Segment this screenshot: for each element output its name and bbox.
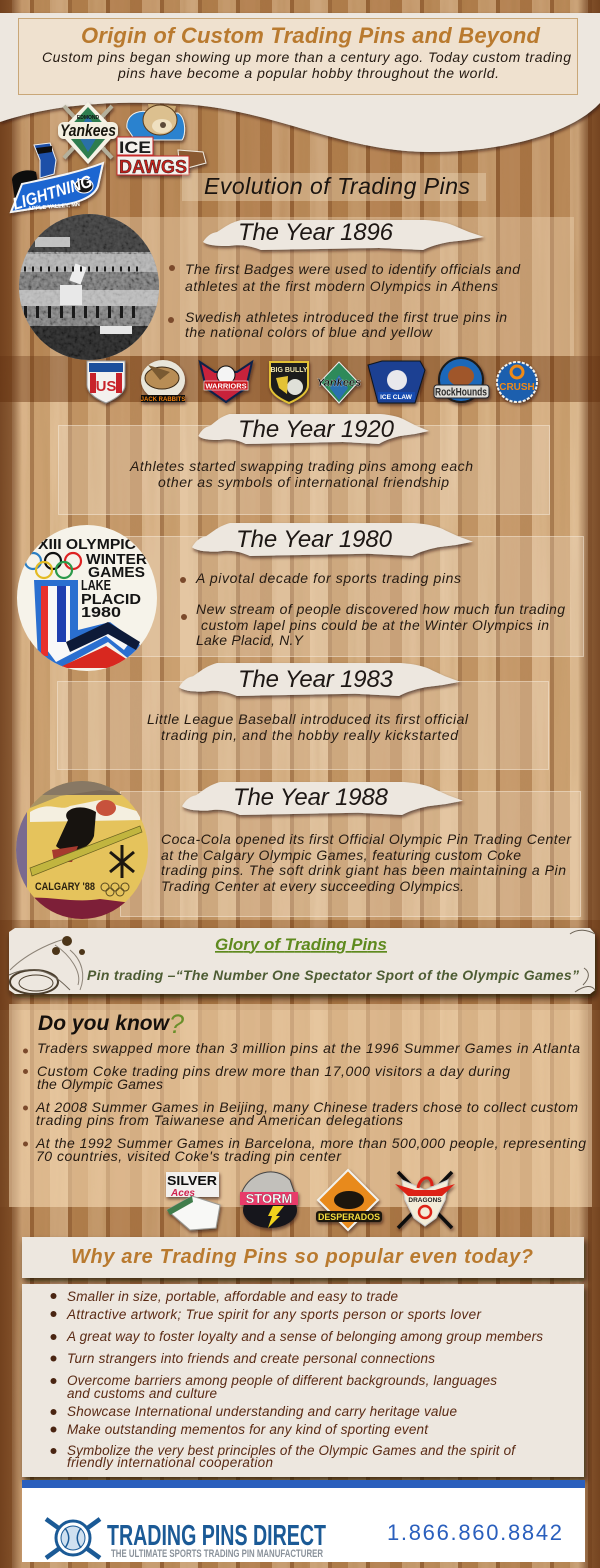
pin: Jack Rabbits: JACK RABBITS xyxy=(141,397,185,403)
pin: Warriors soccer: WARRIORS xyxy=(205,382,247,390)
title box xyxy=(18,18,578,94)
pin: Crush: CRUSH xyxy=(499,382,535,393)
panel: reasons list: Showcase International understanding and carry heritage value xyxy=(67,1404,457,1419)
pin: Big Bully soccer xyxy=(270,362,308,403)
pin: Ice Dawgs bulldog xyxy=(117,104,206,177)
bullet text: 1896: the national colors of blue and yellow xyxy=(185,324,433,340)
heading: Do you know: ? xyxy=(169,1009,184,1039)
bullet text: 1980: New stream of people discovered how much fun trading xyxy=(196,601,565,617)
banner: 1980 xyxy=(192,523,473,556)
panel: reasons list: friendly international cooperation xyxy=(67,1455,273,1470)
ornament: flowers and rings xyxy=(9,930,595,994)
title: Origin of Custom Trading Pins and Beyond xyxy=(81,23,541,48)
pin: RockHounds: RockHounds xyxy=(435,386,487,398)
banner: 1988: The Year 1988 xyxy=(233,784,389,811)
heading: Evolution of Trading Pins: Evolution of Trading Pins xyxy=(204,173,470,199)
header cream wave xyxy=(0,13,600,152)
text: 1988: at the Calgary Olympic Games, featuring custom Coke xyxy=(161,847,521,863)
pin: Storm: STORM xyxy=(246,1191,292,1206)
facts list: the Olympic Games xyxy=(37,1076,163,1092)
text: 1983 xyxy=(147,711,469,743)
banner: 1896 xyxy=(203,219,484,250)
banner: 1896: The Year 1896 xyxy=(238,219,394,246)
panel: The Year 1983 xyxy=(58,663,548,770)
pin: Ice Dawgs bulldog: ICE xyxy=(119,138,151,157)
pin: Lightning xyxy=(10,143,103,214)
facts list: At the 1992 Summer Games in Barcelona, more than 500,000 people, representing xyxy=(35,1135,586,1151)
pin: Jack Rabbits xyxy=(141,360,185,403)
tagline: Pin trading –“The Number One Spectator Sport of the Olympic Games” xyxy=(87,967,579,983)
pin: RockHounds xyxy=(434,358,489,402)
pin row xyxy=(87,358,537,403)
facts list: Traders swapped more than 3 million pins at the 1996 Summer Games in Atlanta xyxy=(37,1040,580,1056)
pin: Lightning: APPLE VALLEY, MN xyxy=(28,202,80,212)
emblem: Lake Placid 1980 xyxy=(17,525,157,671)
text: 1983: Little League Baseball introduced its first official xyxy=(147,711,469,727)
banner: 1920 xyxy=(198,414,429,444)
footer xyxy=(22,1480,585,1562)
banner: 1980: The Year 1980 xyxy=(236,526,393,553)
panel: The Year 1988 xyxy=(16,781,580,919)
bullet text: 1980: Lake Placid, N.Y xyxy=(196,632,305,648)
pin: Lightning: LIGHTNING xyxy=(10,172,94,214)
facts list xyxy=(23,1040,586,1164)
panel: reasons list: A great way to foster loyalty and a sense of belonging among group members xyxy=(66,1329,543,1344)
pin: US soccer shield: US xyxy=(96,378,116,395)
heading: Glory: Glory of Trading Pins xyxy=(215,935,387,954)
emblem: Lake Placid 1980: GAMES xyxy=(88,565,145,581)
bullet text: 1980 xyxy=(180,570,565,648)
text: 1920: other as symbols of international friendship xyxy=(158,474,449,490)
emblem: Lake Placid 1980: WINTER xyxy=(86,552,148,568)
facts list: trading pins from Taiwanese and American delegations xyxy=(36,1112,403,1128)
pin: Yankees diamond xyxy=(58,102,118,164)
pin: Dragons xyxy=(395,1172,455,1228)
pin: Yankees small: Yankees xyxy=(317,377,361,389)
pin: Silver Aces: Aces xyxy=(170,1188,195,1199)
banner: 1920: The Year 1920 xyxy=(238,416,395,443)
emblem: Lake Placid 1980: PLACID xyxy=(81,592,141,608)
logo wordmark: TRADING PINS DIRECT xyxy=(107,1520,326,1552)
bullet text: 1896: Swedish athletes introduced the first true pins in xyxy=(185,309,507,325)
bullet text: 1896 xyxy=(168,261,521,340)
bullet text: 1980: custom lapel pins could be at the Winter Olympics in xyxy=(201,617,549,633)
pin: US soccer shield xyxy=(87,361,125,403)
emblem: Lake Placid 1980: 1980 xyxy=(81,605,121,621)
facts list: 70 countries, visited Coke's trading pin center xyxy=(36,1148,342,1164)
heading box: Why are Trading Pins so popular: Why are Trading Pins so popular even today? xyxy=(71,1246,533,1268)
pin: Big Bully soccer: BIG BULLY xyxy=(270,367,308,374)
panel: reasons list: and customs and culture xyxy=(67,1386,217,1401)
panel: reasons list: Overcome barriers among people of different backgrounds, languages xyxy=(67,1373,497,1388)
pin: Desperados xyxy=(316,1170,382,1230)
text: 1988: Coca-Cola opened its first Official Olympic Pin Trading Center xyxy=(161,831,572,847)
pin artwork: Calgary 88: CALGARY '88 xyxy=(35,881,95,893)
emblem: Lake Placid 1980: XIII OLYMPIC xyxy=(38,537,137,553)
pin: Storm xyxy=(240,1172,298,1228)
pin: Ice Claw xyxy=(368,361,425,403)
facts list: Custom Coke trading pins drew more than 17,000 visitors a day during xyxy=(37,1063,510,1079)
panel: reasons list: Make outstanding mementos for any kind of sporting event xyxy=(67,1422,429,1437)
panel: The Year 1980 xyxy=(17,523,584,671)
pin: Desperados: DESPERADOS xyxy=(318,1212,380,1223)
facts list: At 2008 Summer Games in Beijing, many Chinese traders chose to collect custom xyxy=(35,1099,578,1115)
heading: Do you know: Do you know xyxy=(38,1012,171,1035)
panel: The Year 1920 xyxy=(58,414,550,514)
logo: crossed bats and ball xyxy=(46,1519,100,1558)
banner: 1983 xyxy=(179,663,460,696)
pin artwork: Calgary 88 xyxy=(16,781,148,919)
text: 1920 xyxy=(129,458,473,490)
logo tagline: THE ULTIMATE SPORTS TRADING PIN MANUFACTURER xyxy=(111,1548,323,1560)
phone number: 1.866.860.8842 xyxy=(387,1520,562,1545)
intro text xyxy=(42,49,571,81)
bullet text: 1896: The first Badges were used to identify officials and xyxy=(185,261,521,277)
banner: Glory of Trading Pins xyxy=(9,928,595,994)
pin row: Silver Aces, Storm, Desperados, Dragons xyxy=(166,1170,455,1230)
pin: Yankees diamond: Yankees xyxy=(60,121,116,140)
bullet text: 1980: A pivotal decade for sports trading pins xyxy=(195,570,461,586)
pin: Ice Claw: ICE CLAW xyxy=(380,394,413,401)
panel: reasons list: Smaller in size, portable, affordable and easy to trade xyxy=(67,1289,398,1304)
heading: Do you know xyxy=(38,1009,184,1039)
panel: The Year 1896 xyxy=(19,214,574,360)
pin: Silver Aces: SILVER xyxy=(167,1173,218,1188)
banner: 1988 xyxy=(182,782,463,815)
pin: Silver Aces xyxy=(166,1172,220,1230)
pin: Dragons: DRAGONS xyxy=(408,1197,442,1204)
panel: reasons list: Symbolize the very best principles of the Olympic Games and the spirit of xyxy=(67,1443,516,1458)
panel: reasons list: Turn strangers into friends and create personal connections xyxy=(67,1351,435,1366)
text: 1920: Athletes started swapping trading pins among each xyxy=(129,458,473,474)
intro text: pins have become a popular hobby throughout the world. xyxy=(117,65,499,81)
bullet text: 1896: athletes at the first modern Olympics in Athens xyxy=(185,278,498,294)
pin: Warriors soccer xyxy=(200,362,252,402)
text: 1983: trading pin, and the hobby really kickstarted xyxy=(161,727,459,743)
text: 1988: trading pins. The soft drink giant has been maintaining a Pin xyxy=(161,862,566,878)
pin: Crush xyxy=(497,362,537,402)
emblem: Lake Placid 1980: LAKE xyxy=(81,578,111,594)
pin: Yankees small xyxy=(317,362,361,403)
text: 1988 xyxy=(161,831,572,894)
panel: Do you know xyxy=(9,1004,592,1207)
text: 1988: Trading Center at every succeeding Olympics. xyxy=(161,878,464,894)
heading box: Why are Trading Pins so popular xyxy=(22,1237,584,1278)
photo: Olympic opening 1896 xyxy=(19,214,159,360)
pin: Ice Dawgs bulldog: DAWGS xyxy=(119,157,187,177)
intro text: Custom pins began showing up more than a century ago. Today custom trading xyxy=(42,49,571,65)
panel: reasons list: Attractive artwork; True spirit for any sports person or sports lover xyxy=(66,1307,481,1322)
pin: Yankees diamond: EDMOND xyxy=(77,115,99,121)
panel: reasons list xyxy=(22,1284,584,1477)
banner: 1983: The Year 1983 xyxy=(238,666,394,693)
